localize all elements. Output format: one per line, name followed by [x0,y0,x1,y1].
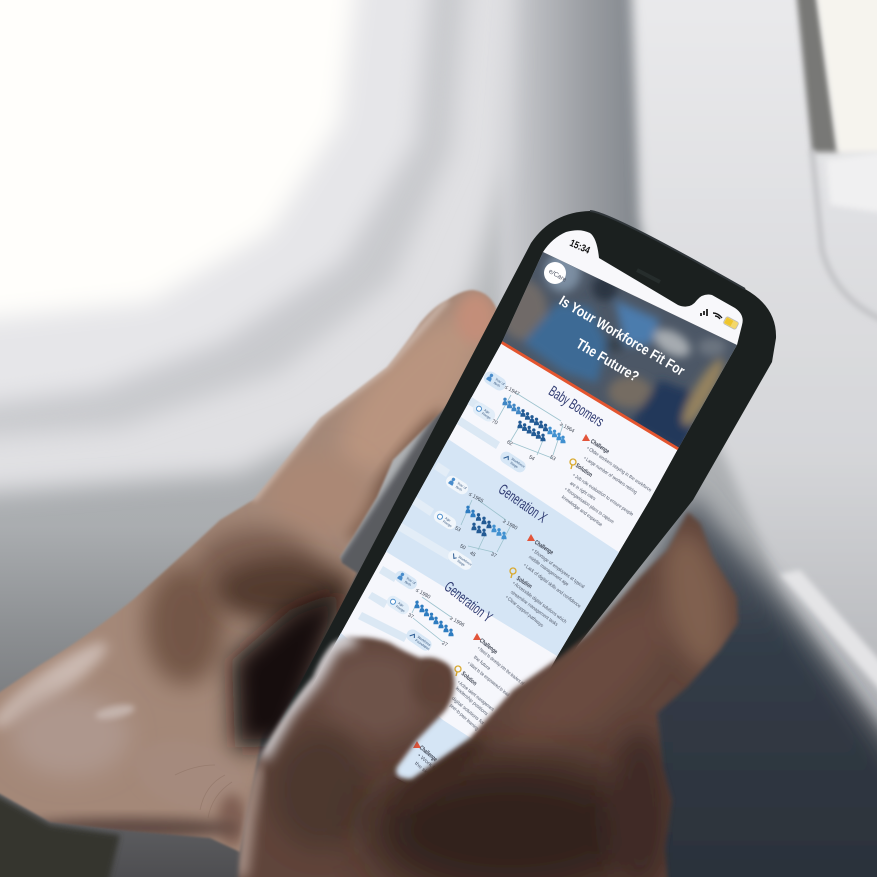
phone body [280,211,776,860]
panel: Baby Boomers [457,369,653,528]
solution text: • Reorganisation plans to capture [563,487,615,525]
shadowed gap between finger and phone [300,300,520,620]
panel: next generation challenge, partly hidden: • Work to [416,753,439,773]
birth years and ages: ≥ 1980 [502,518,518,532]
pill: year of birth: Birth [455,485,463,492]
pill: workforce stage: Workforce [510,457,526,469]
panel: Generation X [396,462,586,629]
birth years and ages: ≤ 1980 [414,587,431,601]
right hand with thumb and fingers [238,512,739,877]
panel: next generation challenge, partly hidden: the skills [413,761,434,780]
logo badge [544,262,568,284]
heading: Generation X [495,481,550,527]
pill: year of birth: Year of [456,481,467,490]
section band: next generation background [334,633,471,780]
status bar background [543,230,743,345]
pill: year of birth: Year of [405,576,416,585]
pill: year of birth: Year of [494,377,505,386]
pill: age range: Range [395,604,406,613]
battery icon [723,316,739,330]
birth years and ages: 53 [454,525,462,534]
phone screen [314,252,737,782]
panel: next generation challenge, partly hidden [413,741,439,780]
challenge icon [582,434,590,441]
pill: year of birth: Birth [404,580,412,587]
panel: next generation challenge, partly hidden: Challenge [418,744,439,763]
pill: workforce stage: Stage [456,559,466,567]
pill: age range: Age [397,601,404,608]
status bar: time, signal, wifi, battery [568,238,739,330]
pill: age range [473,402,495,422]
people icons row 2 [517,421,546,441]
challenge text: the future [472,655,492,672]
red header divider [501,342,680,450]
solution text [448,670,495,732]
earpiece in notch [637,270,660,282]
right cabin panel and second window [630,0,877,780]
challenge icon [527,534,535,541]
wifi icon [713,313,722,319]
birth years and ages: 37 [406,612,415,621]
pill: age range: Range [481,411,492,420]
birth years and ages: 27 [440,640,449,649]
section band: Generation X background [385,437,620,656]
panel: Generation Y [358,566,525,732]
people icons row 1 [502,398,566,443]
challenge text [522,539,586,610]
heading: Baby Boomers [545,383,607,430]
solution text: • Job role evaluation to ensure people [571,473,635,518]
aircraft window with frame [0,0,514,496]
solution text [560,462,635,528]
logo badge: e/Care [547,268,568,284]
title [558,295,685,380]
people icons [465,506,507,539]
wrinkles on left thumb [175,765,232,818]
challenge text: Challenge [533,539,555,557]
challenge icon [473,633,481,640]
solution icon [455,666,461,676]
title: The Future? [573,336,641,386]
birth years and ages: 62 [506,439,514,448]
solution text: • Clear support pathways [504,595,545,629]
header photo of nurses [502,252,737,448]
pill: age range [434,510,456,530]
pill: workforce stage: Stage [509,461,519,469]
challenge text: • Need to develop into the leaders of [476,646,525,687]
pill: workforce stage [448,550,472,570]
solution text: are in right roles [568,481,597,502]
birth years and ages: 45 [468,550,477,559]
pill: year of birth: Birth [493,381,501,388]
sleeve at wrist [0,775,120,877]
pill: age range: Age [483,408,490,415]
birth years and ages: ≤ 1947 [504,384,520,398]
challenge text: • Shortage of employees at typical [530,548,586,590]
challenge text: middle management age [527,555,570,588]
solution text: Solution [460,670,478,687]
solution text: • Accessible digital solutions which [511,581,568,625]
birth years and ages [454,491,518,560]
signal bars [701,309,707,316]
age and birth-year lines [412,597,451,642]
birth years and ages: ≥ 1996 [448,615,465,629]
challenge text: Challenge [478,637,499,656]
birth years and ages [406,587,465,649]
solution icon [570,459,576,469]
birth years and ages: ≤ 1965 [468,491,484,505]
pill: year of birth [484,372,506,390]
birth years and ages: 70 [490,418,499,427]
heading: Generation Y [441,578,495,626]
birth years and ages: 50 [458,543,467,552]
solution text: knowledge and expertise [560,495,604,528]
hatched band decorations [457,396,500,449]
age and birth-year lines [461,500,510,552]
dark cleft between hands [232,590,340,748]
pill: year of birth [396,570,417,590]
solution text: Solution [574,462,594,479]
pill: age range [387,596,409,614]
birth years and ages: 54 [528,454,536,463]
solution text: peer-to-peer learning [448,703,480,732]
pill: workforce stage: Workforce [457,555,473,567]
pill: workforce stage: Foundation [414,638,431,651]
status time: 15:34 [568,238,592,257]
hatched band decorations [396,462,452,560]
hatched band decorations [358,566,408,642]
solution text: streamline management tasks [509,590,559,628]
bright seat strip [780,570,877,710]
solution text: digital solutions for [450,696,486,727]
birth years and ages [490,384,575,463]
left hand with index finger [0,290,505,852]
solution icon [510,568,516,578]
solution text: leadership positions [454,686,489,717]
solution text: Solution [515,575,533,590]
people icons [414,601,454,636]
pill: age range: Range [442,519,453,528]
pill: workforce stage: Workforce [417,635,432,647]
challenge text: Challenge [589,438,611,456]
title: Is Your Workforce Fit For [556,293,687,380]
birth years and ages: 53 [548,454,557,463]
pill: workforce stage [500,452,526,472]
challenge text [466,637,525,698]
dark cabin floor area [640,490,877,877]
solution text [506,576,566,627]
age and birth-year lines [497,393,563,458]
solution text: • Active talent management [456,680,495,713]
pill: workforce stage [404,627,434,653]
pill: year of birth [446,476,468,494]
challenge text: • Want to be empowered to lead [466,661,510,698]
challenge text: • Large number of workers retiring [582,456,638,496]
birth years and ages: 37 [490,551,498,560]
challenge text: • Older workers staying in the workforce [585,446,653,494]
challenge text: • Lack of digital skills and confidence [522,563,582,610]
pill: age range: Age [444,516,451,523]
birth years and ages: ≥ 1964 [558,421,575,435]
